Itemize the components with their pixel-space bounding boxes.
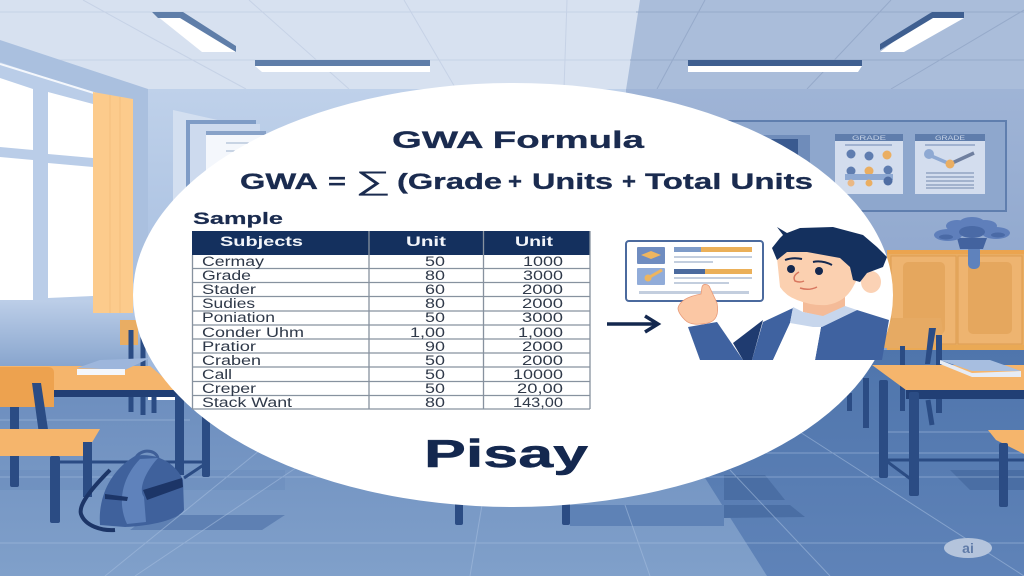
ceiling light left xyxy=(152,12,236,52)
table rows: 3000 xyxy=(523,268,563,283)
right wall xyxy=(626,89,1024,359)
eyes xyxy=(787,265,823,275)
window panes xyxy=(0,78,93,300)
screen card xyxy=(626,241,763,301)
table rows: 2000 xyxy=(522,339,563,354)
ai badge xyxy=(944,538,992,558)
table rows: 60 xyxy=(425,282,445,297)
table rows: 143,00 xyxy=(513,395,563,410)
right desk xyxy=(863,365,1024,496)
poster: grade chart two xyxy=(915,134,985,194)
arm xyxy=(688,322,743,360)
table header: Unit xyxy=(515,233,553,249)
table rows: 50 xyxy=(425,310,445,325)
table rows: 1,00 xyxy=(410,325,445,340)
table rows: Conder Uhm xyxy=(202,325,304,340)
back wall xyxy=(148,89,628,389)
formula: (Grade xyxy=(397,169,502,194)
formula: + xyxy=(622,169,636,194)
ceiling light centre right xyxy=(688,60,862,72)
table header xyxy=(192,231,590,255)
table rows: 50 xyxy=(425,254,445,269)
right bulletin board xyxy=(724,121,1006,211)
white ellipse panel xyxy=(133,83,893,507)
jacket shadow xyxy=(733,320,763,360)
table rows: 1,000 xyxy=(518,325,563,340)
back left chair xyxy=(120,320,154,415)
collar xyxy=(790,306,857,327)
table rows: 2000 xyxy=(522,296,563,311)
poster: grade chart one: GRADE xyxy=(852,136,886,142)
table rows: 1000 xyxy=(523,254,563,269)
footer label: Pisay xyxy=(424,433,588,476)
cabinet xyxy=(887,250,1024,350)
table rows: Craben xyxy=(202,353,261,368)
jacket right xyxy=(815,310,889,360)
table rows: Cermay xyxy=(202,254,264,269)
table rows xyxy=(202,254,563,410)
ai badge: ai xyxy=(962,540,974,556)
neck xyxy=(803,295,845,317)
poster: grade chart two: GRADE xyxy=(935,136,965,142)
left desk book xyxy=(77,358,150,375)
table rows: 20,00 xyxy=(517,381,563,396)
arrow xyxy=(607,316,658,332)
jacket left xyxy=(752,308,793,360)
table rows: Stack Want xyxy=(202,395,292,410)
icon: key xyxy=(637,268,665,285)
table rows: Sudies xyxy=(202,296,255,311)
student character xyxy=(678,227,889,360)
table rows: 80 xyxy=(425,395,445,410)
formula: Total Units xyxy=(645,169,813,194)
left wall xyxy=(0,40,148,400)
table header: Unit xyxy=(406,233,446,249)
table header: Subjects xyxy=(220,233,303,249)
sigma symbol: ∑ xyxy=(355,166,391,196)
face xyxy=(777,245,862,305)
nose and mouth xyxy=(794,272,817,289)
table rows: 2000 xyxy=(522,282,563,297)
floor xyxy=(0,350,1024,576)
table rows: 3000 xyxy=(522,310,563,325)
table rows: 2000 xyxy=(522,353,563,368)
table rows: 90 xyxy=(425,339,445,354)
table rows: 80 xyxy=(425,296,445,311)
sample heading: Sample xyxy=(193,209,283,228)
poster: grade chart one xyxy=(835,134,903,194)
ceiling light centre left xyxy=(255,60,430,72)
right desk book xyxy=(940,360,1021,377)
formula xyxy=(240,166,813,196)
table rows: Stader xyxy=(202,282,257,297)
curtain rail xyxy=(0,64,97,94)
ceiling xyxy=(0,0,1024,90)
icon: graduation cap xyxy=(637,247,665,264)
sample table xyxy=(192,231,590,410)
table rows: 50 xyxy=(425,367,445,382)
table rows: Grade xyxy=(202,268,251,283)
shirt xyxy=(773,323,821,360)
right back chair xyxy=(847,318,943,425)
formula: Units xyxy=(532,169,613,194)
title: GWA Formula xyxy=(392,127,645,154)
ear xyxy=(861,271,881,293)
eyebrows xyxy=(785,258,832,265)
table rows: 50 xyxy=(425,353,445,368)
table rows: Creper xyxy=(202,381,257,396)
left whiteboard xyxy=(173,110,266,210)
table rows: Poniation xyxy=(202,310,275,325)
table rows: Pratior xyxy=(202,339,257,354)
formula: GWA xyxy=(240,169,318,194)
hair xyxy=(772,227,887,282)
curtain xyxy=(93,92,133,313)
table grid xyxy=(192,231,590,409)
backpack xyxy=(81,451,184,530)
formula: + xyxy=(508,169,522,194)
left desk xyxy=(0,366,210,478)
hand xyxy=(678,284,718,324)
table rows: 10000 xyxy=(513,367,563,382)
plant xyxy=(934,217,1010,269)
table rows: 50 xyxy=(425,381,445,396)
left chair xyxy=(0,367,100,523)
table rows: Call xyxy=(202,367,232,382)
right stool xyxy=(988,430,1024,507)
formula: = xyxy=(328,169,346,194)
centre desk legs xyxy=(455,500,570,525)
ceiling light right xyxy=(880,12,964,52)
table rows: 80 xyxy=(425,268,445,283)
